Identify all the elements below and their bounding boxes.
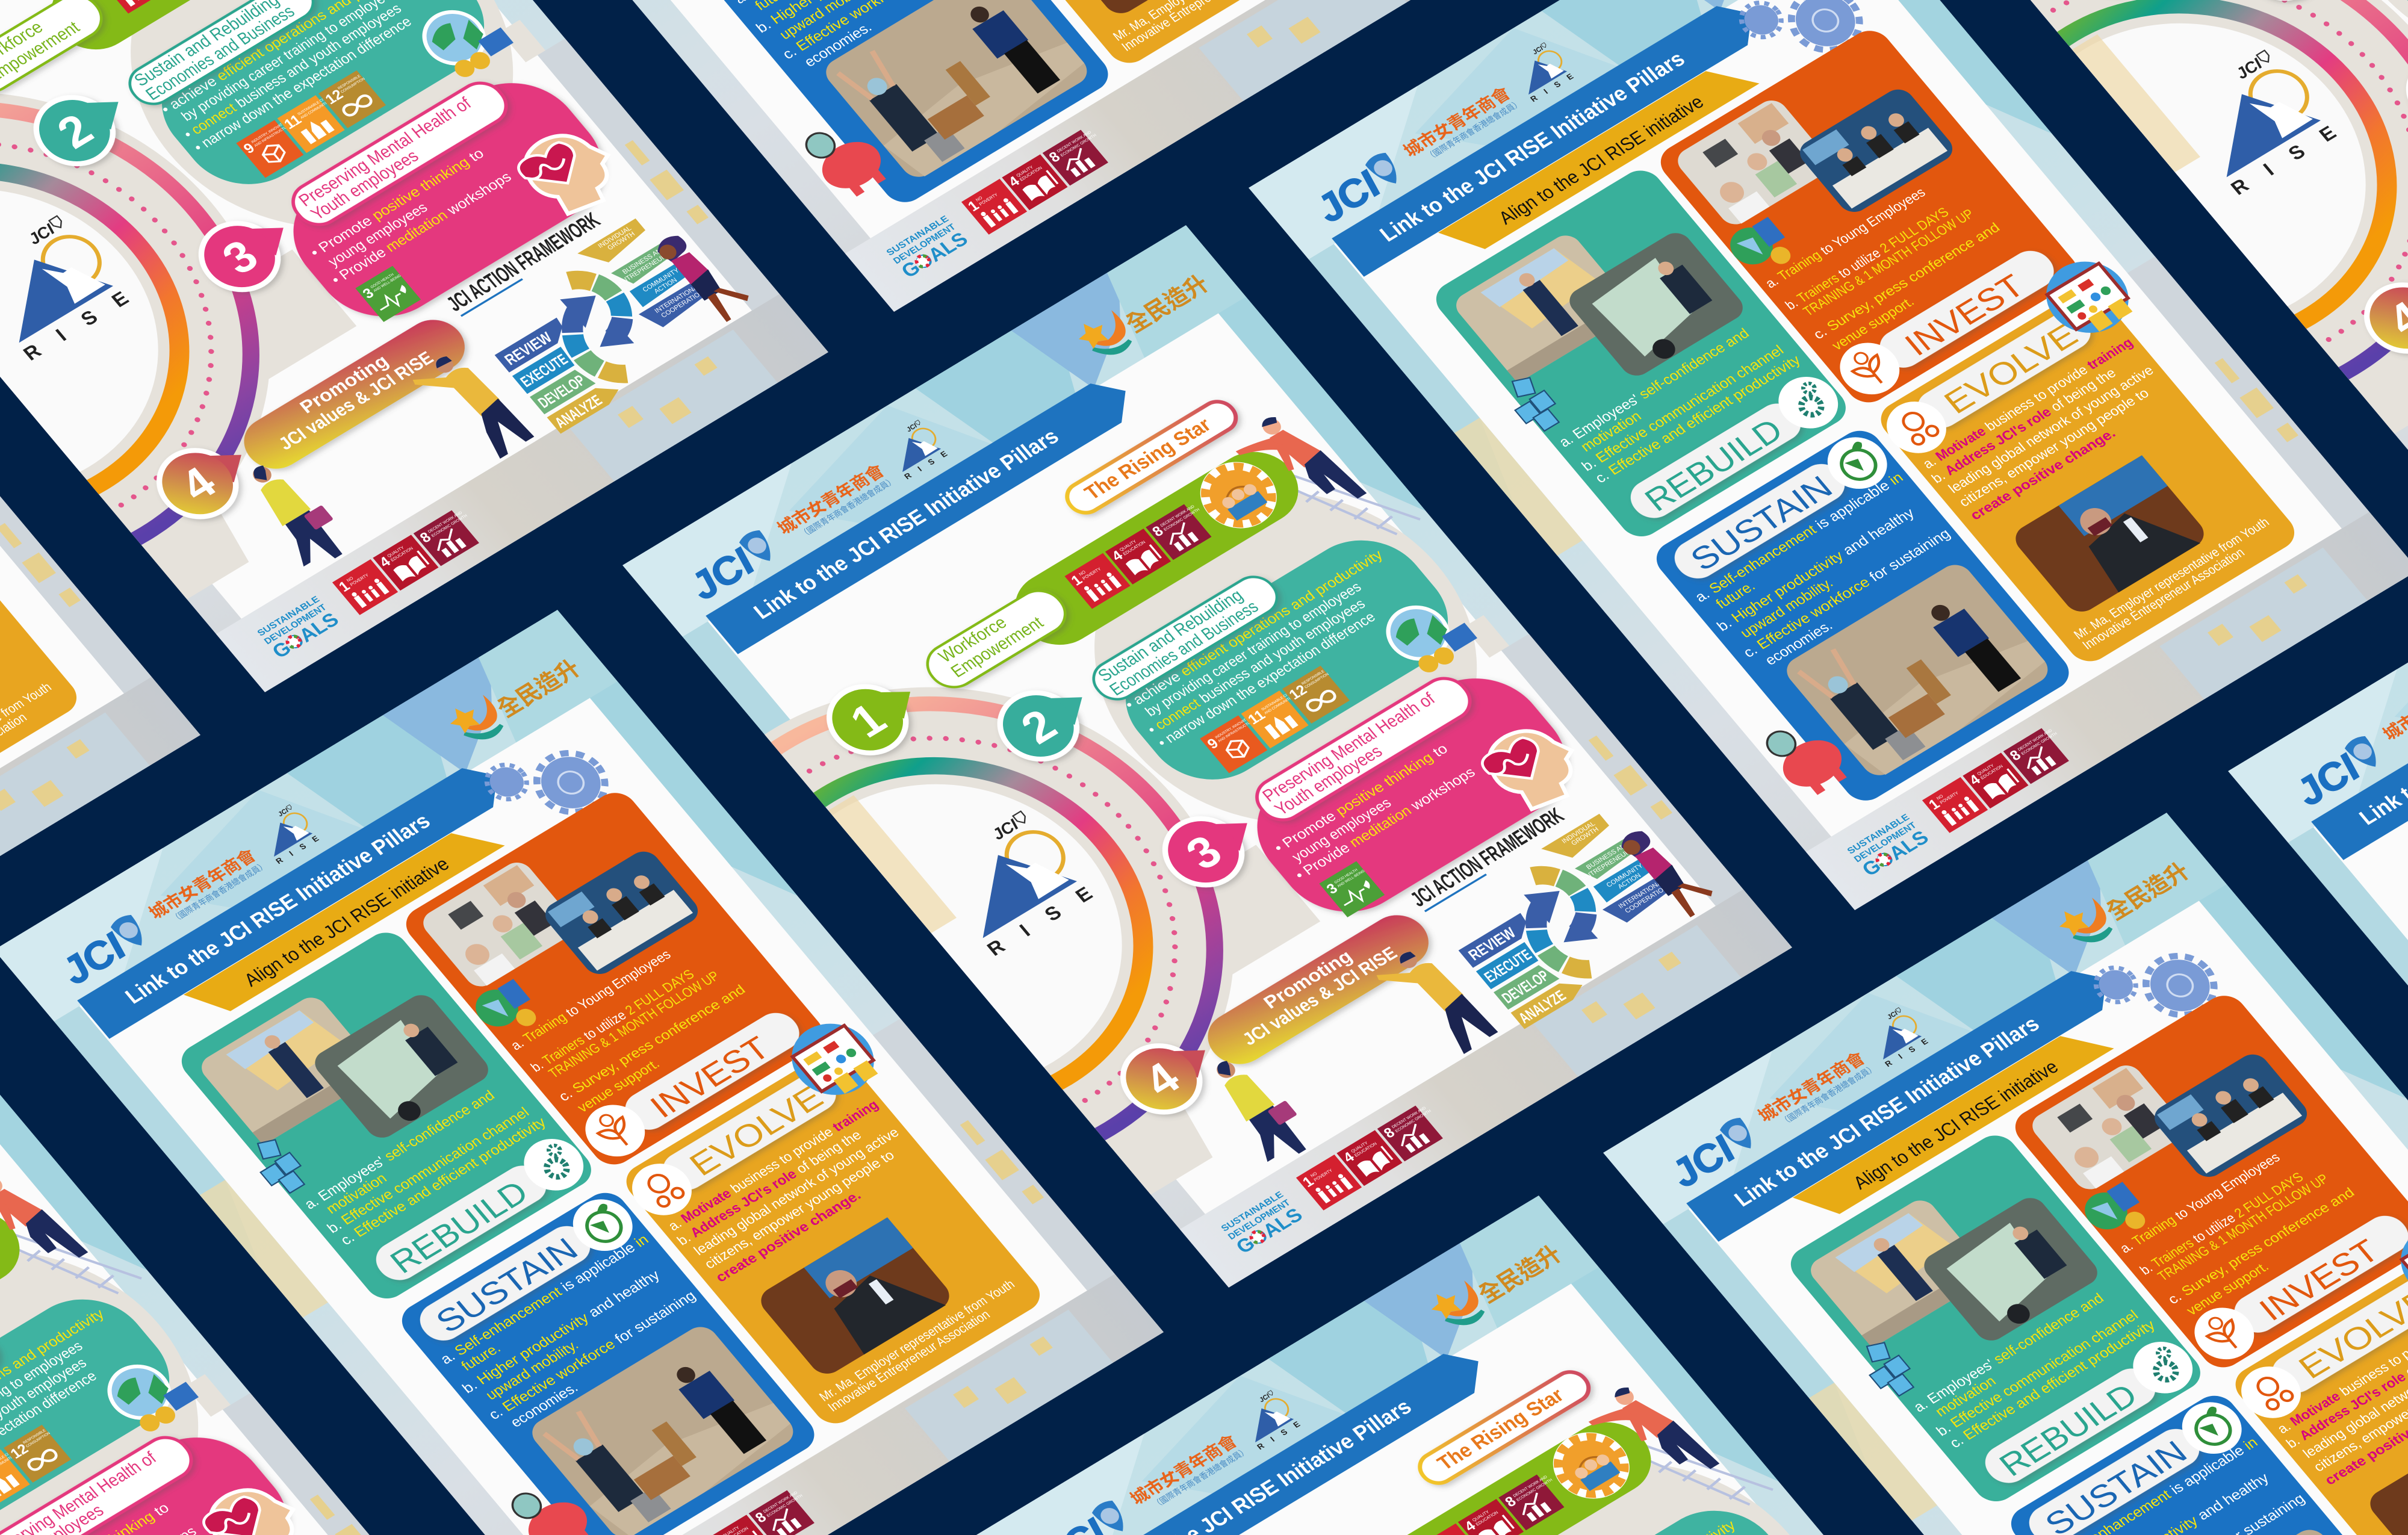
- icon: head with heart: [1474, 715, 1595, 820]
- REBUILD label: REBUILD: [1637, 412, 1790, 518]
- logo: JCI: [680, 527, 786, 607]
- right labels: ENTREPRENEURSHIP: [1581, 840, 1645, 882]
- left labels: REVIEW: [1465, 924, 1519, 964]
- tile: SDG 12: 12: [1286, 682, 1311, 703]
- right labels: GROWTH: [1570, 826, 1600, 847]
- pill: Workforce Empowerment: Workforce: [935, 613, 1011, 666]
- bullet list: • Provide meditation workshops: [1292, 764, 1479, 883]
- icon: green globe: [1816, 427, 1899, 499]
- tile: SDG 4: [1336, 1130, 1403, 1186]
- organisation name: （國際青年商會香港總會成員）: [798, 476, 898, 539]
- shared paper and header: [622, 225, 1792, 1288]
- tile: SDG 3: AND WELL-BEING: [1337, 869, 1366, 888]
- figure: man climbing: [1228, 403, 1367, 532]
- tile: SDG 4: QUALITY: [1350, 1141, 1369, 1154]
- bubble 4: 4: [1134, 1053, 1190, 1106]
- panel: teal sustain card: [1100, 519, 1482, 811]
- JCI action framework heading: [1406, 803, 1569, 913]
- bullet list: • narrow down the expectation difference: [1155, 609, 1379, 751]
- small RISE logo: S: [926, 457, 937, 467]
- icon: piggy bank: [1757, 712, 1857, 802]
- tile: SDG 8: [1146, 500, 1219, 560]
- REBUILD bullets: [1556, 314, 1804, 489]
- right labels: INTERNATIONAL: [1617, 878, 1666, 910]
- dotted ring: [627, 662, 1267, 1210]
- left labels: ANALYZE: [1515, 987, 1569, 1026]
- SUSTAIN bullets: b. Higher productivity and healthy: [1714, 505, 1918, 634]
- tile: SDG 8: ECONOMIC GROWTH: [1394, 1109, 1432, 1133]
- tile: SDG 1: [1296, 1155, 1362, 1211]
- title ribbon: [706, 372, 1142, 654]
- bubble 1: 1: [840, 694, 896, 747]
- small RISE logo: E: [939, 450, 949, 459]
- tile: SDG 12: CONSUMPTION: [1304, 672, 1330, 689]
- tile: SDG 9: AND INFRASTRUCTURE: [1218, 719, 1256, 743]
- arc segments: [1500, 863, 1625, 981]
- pill: Promoting JCI values: Promoting: [1259, 946, 1356, 1012]
- small RISE logo: R: [902, 471, 913, 481]
- panel: INVEST: [1652, 23, 2086, 409]
- repeated poster: pillars, far left: [0, 13, 200, 1075]
- icon: bulb: [1875, 392, 1958, 463]
- tile: SDG 1: NO: [1309, 1171, 1318, 1178]
- repeated poster: pillars, top: [288, 0, 1457, 312]
- SDG logo: GOALS: [1232, 1204, 1307, 1257]
- photo: team selfie: [1672, 95, 1835, 229]
- bubble 3: 3: [1176, 826, 1232, 879]
- bubble 2: 2: [1011, 700, 1067, 753]
- tile: SDG 3: [1319, 861, 1385, 917]
- logo: 全民造升: [1072, 261, 1216, 364]
- pill: Sustain and Rebuilding: Sustain and Rebuilding: [1094, 586, 1247, 686]
- icon: globe with coins: [1376, 589, 1482, 680]
- icon: planning board: [2030, 248, 2145, 347]
- tile: SDG 9: [1200, 710, 1276, 774]
- organisation name: 城市女青年商會: [774, 462, 889, 538]
- SUSTAIN label: [1666, 457, 1854, 586]
- SDG logo: DEVELOPMENT: [1226, 1198, 1292, 1242]
- tile: SDG 3: GOOD HEALTH: [1334, 869, 1359, 885]
- right labels: COOPERATION: [1624, 884, 1669, 914]
- panel: REBUILD: [1421, 164, 1854, 547]
- bubble 1: [810, 663, 937, 769]
- ribbon: Align: Align to the JCI RISE initiative: [1494, 91, 1708, 228]
- EVOLVE bullets: [1917, 335, 2180, 526]
- bullet list: by providing career training to employees: [1142, 579, 1365, 720]
- right labels: COMMUNITY: [1605, 862, 1645, 889]
- tile: SDG 11: AND COMMUNITIES: [1264, 695, 1296, 715]
- bullet list: [1122, 547, 1419, 751]
- SUSTAIN bullets: economies.: [1762, 618, 1836, 669]
- SUSTAIN label: SUSTAIN: [1683, 469, 1840, 577]
- bullet list: • Promote positive thinking to: [1271, 741, 1451, 856]
- JCI action framework heading: JCI ACTION FRAMEWORK: [1406, 803, 1568, 911]
- ribbon: Align: [1438, 54, 1760, 262]
- figure: man painting: [1372, 941, 1499, 1063]
- REBUILD label: [1622, 397, 1810, 526]
- pill: The Rising Star: [1060, 396, 1243, 518]
- tile: SDG 3: 3: [1324, 881, 1341, 898]
- figure: man with suitcase: [1197, 1049, 1320, 1169]
- INVEST bullets: venue support.: [1829, 294, 1917, 353]
- tile: SDG 4: [1105, 529, 1171, 585]
- EVOLVE bullets: leading global network of young active: [1945, 362, 2156, 496]
- REBUILD bullets: b. Effective communication channel: [1578, 343, 1787, 474]
- INVEST bullets: [1762, 167, 2015, 359]
- caption: Mr. Ma, Employer representative from Youth: [2071, 515, 2272, 642]
- icon: money plant: [1828, 333, 1911, 405]
- right labels: INDIVIDUAL: [1560, 820, 1597, 845]
- small RISE logo: JCI: [905, 422, 919, 433]
- SUSTAIN bullets: [1690, 470, 1965, 677]
- bubble 3: [1146, 795, 1273, 901]
- poster: objectives, centre: [622, 225, 1792, 1288]
- bubble 4: [1104, 1022, 1231, 1128]
- REBUILD bullets: motivation: [1578, 408, 1645, 455]
- tile: SDG 12: [1282, 665, 1350, 724]
- SUSTAIN bullets: c. Effective workforce for sustaining: [1740, 526, 1953, 661]
- logo: JCI: JCI: [680, 540, 764, 607]
- EVOLVE label: [1909, 305, 2099, 435]
- tile: SDG 8: DECENT WORK AND: [1391, 1106, 1427, 1129]
- SUSTAIN bullets: a. Self-enhancement is applicable in: [1692, 470, 1907, 606]
- tile: SDG 8: 8: [1381, 1124, 1398, 1141]
- left labels: EXECUTE: [1481, 946, 1535, 986]
- icon: globe: [1722, 214, 1799, 281]
- small RISE logo: [878, 418, 952, 481]
- REBUILD bullets: c. Effective and efficient productivity: [1592, 352, 1804, 486]
- EVOLVE label: EVOLVE: [1937, 317, 2085, 421]
- tile: SDG 12: RESPONSIBLE: [1301, 670, 1326, 686]
- inner white disc: [702, 725, 1192, 1146]
- EVOLVE bullets: a. Motivate business to provide training: [1920, 335, 2136, 471]
- bubble 2: [981, 669, 1108, 775]
- tile: SDG 4: 4: [1340, 1149, 1358, 1166]
- tile: SDG 11: 11: [1245, 707, 1268, 728]
- INVEST bullets: TRAINING & 1 MONTH FOLLOW UP: [1800, 206, 1977, 319]
- EVOLVE bullets: b. Address JCI's role of being the: [1928, 365, 2119, 486]
- ladder: [1265, 429, 1421, 567]
- panel: EVOLVE: [1853, 248, 2326, 669]
- framework diagram: [1430, 805, 1709, 1029]
- repeated poster: objectives, lower left: [0, 984, 514, 1535]
- inner gradient ring: [672, 700, 1222, 1171]
- repeated poster: objectives, upper left: [0, 0, 828, 825]
- bullet list: • achieve efficient operations and productivity: [1122, 547, 1386, 713]
- figure: woman walking: [1616, 820, 1720, 922]
- photo: employer speaker: [2009, 455, 2211, 617]
- photo: exercise: [1780, 559, 2055, 781]
- repeated poster: objectives, bottom: [756, 1195, 2145, 1535]
- repeated poster: pillars, lower left: [0, 610, 1164, 1535]
- INVEST bullets: a. Training to Young Employees: [1762, 185, 1928, 291]
- pill: Sustain and Rebuilding: Economies and Business: [1106, 597, 1262, 699]
- central JCI RISE logo: [921, 806, 1102, 960]
- right labels: BUSINESS AND: [1585, 840, 1631, 871]
- pill: Preserving Mental Health: Preserving Mental Health of: [1259, 689, 1439, 805]
- EVOLVE bullets: citizens, empower young people to: [1956, 385, 2152, 509]
- tile: SDG 1: POVERTY: [1313, 1168, 1333, 1182]
- tan overlay on left margin: [828, 795, 957, 933]
- pill: Promoting JCI values: [1196, 905, 1441, 1074]
- pill: The Rising Star: The Rising Star: [1080, 414, 1215, 504]
- logo: 全民造升: 全民造升: [1120, 271, 1214, 338]
- REBUILD bullets: a. Employees' self-confidence and: [1556, 326, 1752, 450]
- caption: Innovative Entrepreneur Association: [2079, 545, 2247, 653]
- outer gradient ring: [572, 614, 1322, 1257]
- title ribbon: Link to the JCI RISE Initiative Pillars: [749, 424, 1063, 624]
- icon: gears: [1734, 0, 1873, 80]
- INVEST bullets: b. Trainers to utilize 2 FULL DAYS: [1782, 204, 1952, 312]
- icon: orange gear with team: [1185, 449, 1292, 541]
- panel: pink mental health card: [1230, 656, 1595, 937]
- left labels: DEVELOP: [1498, 967, 1553, 1006]
- tile: SDG 9: INDUSTRY, INNOVATION: [1215, 715, 1253, 740]
- pill: Workforce Empowerment: [918, 583, 1075, 695]
- tile: SDG 11: SUSTAINABLE CITIES: [1261, 690, 1295, 712]
- repeated poster: pillars, far right: [2228, 431, 2408, 1493]
- tile: SDG 9: 9: [1205, 736, 1221, 752]
- right labels: [1541, 805, 1684, 932]
- pill: Workforce Empowerment: Empowerment: [947, 613, 1047, 681]
- tile: SDG 8: [1377, 1101, 1450, 1161]
- pill: Preserving Mental Health: Youth employees: [1271, 742, 1386, 819]
- photo: press conference: [1794, 84, 1958, 217]
- left labels: [1459, 913, 1587, 1029]
- panel: SUSTAIN: [1615, 424, 2078, 827]
- repeated poster: objectives, top right: [1647, 0, 2408, 659]
- icon: rebuild gears: [1767, 367, 1850, 438]
- pill: Promoting JCI values: JCI values & JCI RISE: [1238, 943, 1401, 1049]
- INVEST label: [1871, 244, 2064, 376]
- SUSTAIN bullets: future.: [1713, 578, 1758, 612]
- EVOLVE bullets: create positive change.: [1967, 426, 2118, 523]
- poster: pillars, upper right: [1249, 0, 2408, 910]
- INVEST bullets: c. Survey, press conference and: [1810, 220, 2003, 342]
- tile: SDG 1: 1: [1300, 1174, 1317, 1190]
- INVEST label: INVEST: [1898, 267, 2031, 362]
- right labels: ACTION: [1616, 872, 1642, 890]
- icon: cubes: [1498, 371, 1567, 436]
- small RISE logo: I: [916, 465, 923, 473]
- bullet list: young employees: [1289, 795, 1395, 865]
- SDG logo: [1219, 1189, 1307, 1257]
- shared header and footer: [1249, 0, 2408, 910]
- panel: green workforce: [998, 438, 1315, 659]
- tile: SDG 4: EDUCATION: [1353, 1141, 1378, 1158]
- tile: SDG 1: [1064, 553, 1131, 609]
- SDG tiles row: [1296, 1101, 1450, 1211]
- beige backdrop shapes: [545, 406, 1695, 1327]
- photo: presentation: [1450, 231, 1637, 383]
- bullet list: • connect business and youth employees: [1144, 596, 1368, 737]
- SDG logo: SUSTAINABLE: [1219, 1189, 1286, 1233]
- tile: SDG 11: [1241, 685, 1318, 748]
- SUSTAIN bullets: upward mobility.: [1737, 575, 1837, 641]
- photo: speaker: [1563, 228, 1749, 380]
- repeated poster: pillars, lower right: [1603, 813, 2408, 1535]
